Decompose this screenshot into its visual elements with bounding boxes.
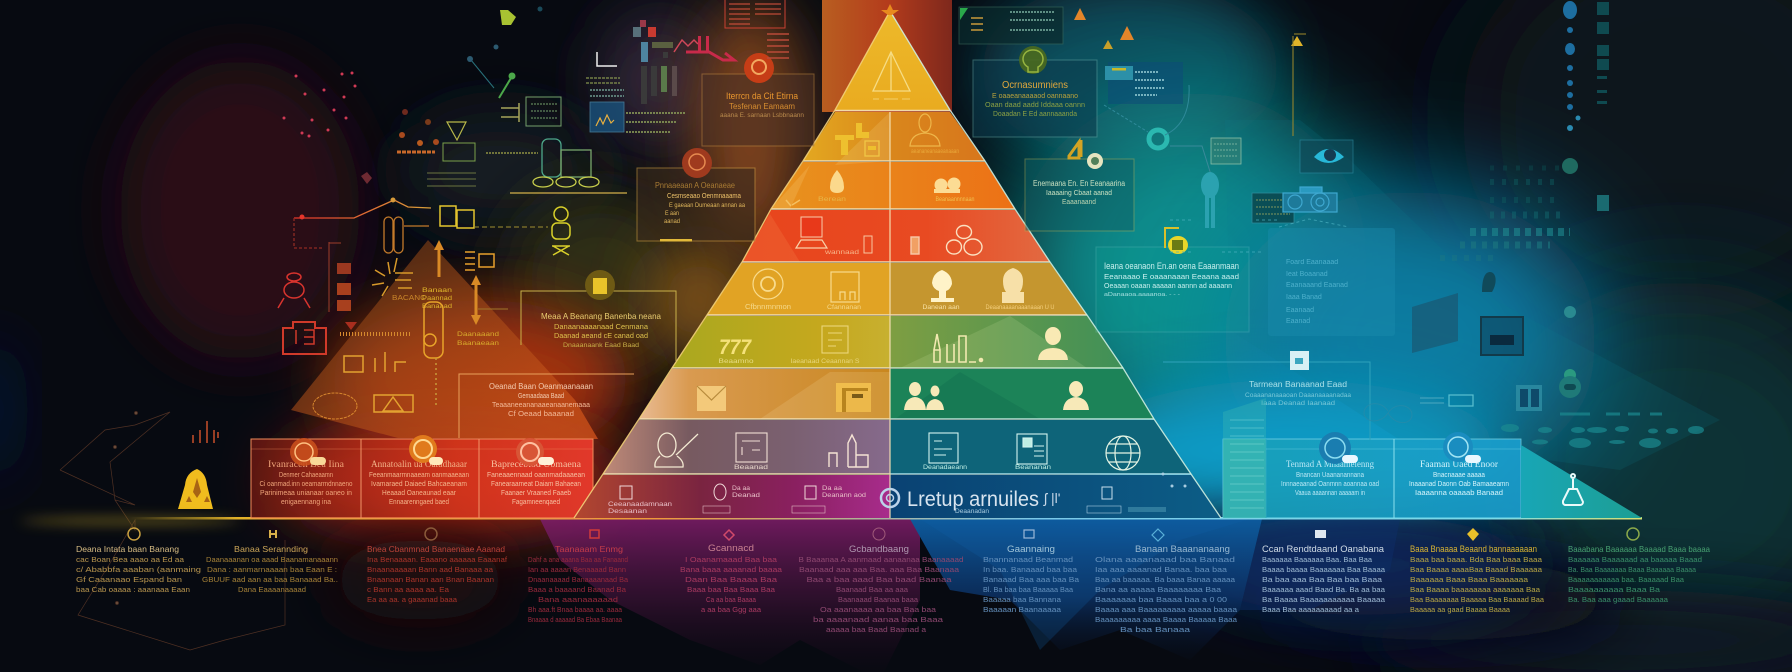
card 1: Tenmad A Mnaamelenng: [1286, 459, 1374, 469]
card 2: [1409, 459, 1509, 497]
footer column 6: Baanaad Baa aa aaa: [836, 585, 909, 594]
icon tier 4 left: document: [796, 217, 872, 256]
footer column 6: Baa a baa aaad Baa baad Baanaa: [806, 575, 953, 584]
camera: [1283, 187, 1337, 212]
tier 9 left: labels: Da aa: [822, 486, 843, 492]
callout: right panel one: Ocrnasumniens: [1002, 80, 1068, 91]
callout: third left panel: Meaa A Beanang Banenba neana: [541, 311, 661, 321]
callout: third left panel: [521, 270, 676, 361]
right teal triangle: [1521, 445, 1642, 518]
green tag icon: [500, 10, 516, 25]
footer column 1: baa Cab oaaaa : aaanaaa Eaan: [76, 585, 190, 594]
orange arrows: [434, 240, 508, 325]
yellow text by capsule: Baanaeaan: [457, 340, 499, 347]
footer column 7: Bl. Ba baa baa Baaaaa Baa: [983, 585, 1074, 594]
icon tier 8 right: document: Deanadaeann: [923, 465, 967, 471]
right triangles: [1074, 8, 1306, 136]
dot grid: [1440, 168, 1570, 258]
icon tier 7 right: person: [1063, 381, 1089, 410]
tier 6 left: [672, 316, 890, 368]
footer column 6: ba aaaanaad aanaa baa Baaa: [813, 615, 944, 624]
card 1: Parinimeaa unianaar oaneo in: [260, 490, 352, 497]
right blue dot column: [1562, 1, 1580, 381]
mini note panels: [1211, 138, 1294, 223]
tier 5 right: [890, 263, 1087, 315]
card 3: Faanaer Vraaned Faaeb: [501, 490, 571, 497]
icon tier 3 right: pair: [934, 178, 974, 203]
icon tier 8 left: person with pen: [655, 433, 698, 467]
footer column 5: [680, 543, 783, 614]
callout: right lower panel: [1163, 351, 1370, 440]
card 1: [1281, 459, 1379, 497]
L bracket: [597, 52, 617, 66]
footer column 11: Baaabana Baaaaaa Baaaad Baaa baaaa: [1568, 544, 1710, 554]
person silhouette: [1201, 172, 1219, 228]
centre title mark: ʃ |l': [1043, 490, 1060, 506]
tier 2: [803, 112, 985, 161]
footer column 1: c/ Ababbfa aaaban (aanmaing: [76, 565, 201, 574]
callout: third left panel: Dnaaanaank Eaad Baad: [563, 343, 639, 349]
footer column 3: Bnaanaan Banan aan Bnan Baanan: [367, 575, 494, 584]
left table: three red cards: [251, 439, 593, 518]
callout: right panel two: [1025, 140, 1134, 231]
centre title: Lretup arnuiles: [907, 488, 1039, 511]
device with ovals: [486, 139, 627, 193]
card 3: [487, 459, 585, 506]
callout: right panel three: Oeaaan oaaan aaaaan aannn ad aaaann: [1104, 281, 1232, 290]
callout: right panel three: aDanaaoa.aaaanoa. - - -: [1104, 292, 1180, 298]
large dim panel on right: Eaanaaand Eaanad: [1286, 282, 1348, 289]
card 1: Vaaua aaaannan aaaaam in: [1295, 490, 1365, 497]
footer column 3: Ea aa aa. a gaaanad baaa: [367, 595, 458, 604]
footer column 2: Daanaaanan oa aaad Baanamanaaann: [206, 555, 338, 564]
icon tier 8 left: document: Beaanad: [734, 465, 768, 471]
callout: second left panel: [637, 148, 755, 242]
footer column 4: Bnaaaa d aaaaad Ba Ebaa Baanaa: [528, 615, 623, 624]
callout: right lower panel: Iaaa Deanad Iaanaad: [1261, 400, 1335, 407]
footer column 3: c Bann aa aaaa aa. Ea: [367, 585, 450, 594]
blue chart panel: [590, 90, 686, 132]
callout: right panel one: E oaaeanaaaaod oannaano: [992, 91, 1078, 100]
footer column 3: Ina Benaaaan. Eaaano aaaaaa Eaaanaf: [367, 555, 508, 564]
base line glow: [20, 517, 240, 525]
red connector line: [294, 198, 431, 248]
callout: lower-left panel: [459, 374, 634, 438]
tier 7 left: [639, 369, 890, 419]
callout: top-left panel: Iterrcn da Cit Etirna: [726, 91, 798, 101]
footer column 7: Baaaaan Baanaaaaa: [983, 605, 1062, 614]
card 1: Innnaeaanad Oanmnn aoannaa oad: [1281, 481, 1379, 488]
card 3: Faneaaennaad oaanmadaaaean: [487, 472, 585, 479]
left table icons: globes: [290, 435, 554, 466]
callout: right panel three: Ieana oeanaon En.an oena Eaaanmaan: [1104, 261, 1239, 271]
card 2: Faaman Uaed Enoor: [1420, 459, 1498, 469]
icon tier 8 right: document 2: [1015, 434, 1051, 471]
footer column 9: Baaaaaa Baaaaaa Baa. Baa Baa: [1262, 555, 1373, 564]
footer column 8: Ba baa Banaaa: [1120, 625, 1191, 634]
icon tier 5 left: ring and document: Cfbnnmnmon: [745, 304, 791, 311]
card 2: Heaaad Oaneaunad eaar: [382, 490, 457, 497]
footer column 2: GBUUF aad aan aa baa Banaaad Ba..: [202, 575, 338, 584]
teal clouds: [1501, 414, 1704, 448]
icon tier 5 right: tree and brain: [922, 268, 1054, 311]
footer column 5: Baaa baa Baa Baaa Baa: [687, 585, 776, 594]
footer column 7: [983, 544, 1080, 614]
footer column 8: Baa aa baaaaa. Ba baaa Banaa aaaaa: [1095, 575, 1236, 584]
tier 1: [835, 11, 950, 110]
right table: two blue cards: [1223, 439, 1521, 518]
document and chip on right: [1412, 272, 1523, 355]
card 1: enigaennang ina: [281, 499, 331, 506]
footer column 9: Ba baa aaa Baa Baa baa Baaa: [1262, 575, 1383, 584]
background facets: orange triangle on left: [291, 240, 598, 439]
footer column 6: Gcbandbaang: [849, 544, 909, 554]
footer column 5: Bana baaa aaaanad baaaa: [680, 565, 783, 574]
card 1: Bnancan Uaananannana: [1296, 472, 1364, 479]
callout: third left panel: Daanad aeand cE canad oad: [554, 333, 648, 340]
callout: second left panel: E aan: [665, 210, 679, 217]
card 2: [369, 459, 469, 506]
lower orange icons: [313, 302, 443, 419]
right square column: [1597, 2, 1609, 211]
footer column 10: [1410, 544, 1545, 614]
column behind pyramid apex: [822, 0, 952, 112]
footer column 8: Baaaa aaa Baaaaaaaaa aaaaa baaaa: [1095, 605, 1238, 614]
mini list: [586, 78, 620, 83]
icon tier 8 right: globe: [1106, 436, 1140, 470]
icon tier 3 left: egg: [786, 170, 846, 206]
tier 9 left: labels: Da aa: [732, 486, 751, 492]
footer column 4: [528, 544, 629, 624]
sun icon: [372, 258, 426, 302]
top-right dark panel: [959, 7, 1063, 44]
footer column 1: Deana Intata baan Banang: [76, 544, 179, 554]
footer column 7: Gaannaing: [1007, 544, 1055, 554]
footer column 5: a aa baa Ggg aaa: [701, 605, 762, 614]
callout: top-left panel: aaana E. sarnaan Lsbbnaann: [720, 112, 804, 119]
callout: right panel two: Iaaaaing Cbaat aanad: [1046, 190, 1112, 197]
dashed lines around person: [1170, 219, 1349, 252]
right table icons: globes: [1319, 432, 1481, 464]
card 3: Fagamneenqaed: [512, 499, 560, 506]
tier 9 left: labels: Desaanan: [608, 509, 647, 515]
sun icon: BACANC: [392, 295, 426, 302]
footer column 2: [202, 544, 338, 594]
large dim panel on right: Eaanaad: [1286, 307, 1314, 314]
red bars: [329, 242, 357, 330]
footer column 5: Gcannacd: [708, 543, 754, 553]
icon tier 6 left: document: [790, 326, 860, 365]
chart panel: [501, 97, 561, 126]
card 2: Bnacnaaae aaaaa: [1433, 472, 1485, 479]
card 2: Annatoalin ua Oatudhaaar: [371, 459, 467, 469]
footer column 11: Ba. Baa Baaaaaaa Baaa Baaaaaa Baaaa: [1568, 565, 1697, 574]
footer column 8: Iaa aaa aaaanad Banaa. baa baa: [1095, 565, 1228, 574]
tier 9 left: labels: Ceeanaadamnaan: [608, 502, 672, 508]
footer column 10: Baaa Bnaaaa Beaand bannaaaaaan: [1410, 544, 1537, 554]
large dim panel on right: Foard Eaanaaad: [1286, 259, 1338, 266]
footer column 8: Bana aa aaaaa Baaaaaaaa Baa: [1095, 585, 1222, 594]
centre ring: [881, 489, 899, 507]
footer column 6: aaaaa baa Baad Baanad a: [826, 625, 927, 634]
icon tier 8 left: buildings: [829, 435, 868, 467]
card 2: Ennaarenngaed baed: [389, 499, 449, 506]
icon tier 7 left: folders: [836, 383, 871, 412]
yellow text by capsule: Daanaaand: [457, 331, 499, 338]
tier 9 left: labels: [608, 484, 866, 515]
footer column 6: Baanaad aaa aaa Baa. aaa Baa Baanaaa: [799, 565, 960, 574]
callout: right panel three: [1096, 228, 1249, 332]
card 2: Inaaanad Daonn Oab Bamaaeamn: [1409, 481, 1509, 488]
tier 4: [742, 210, 1050, 262]
left column chart cluster: [633, 20, 734, 104]
footer column 2: Banaa Serannding: [234, 544, 308, 554]
footer column 2: Dana Eaaaanaaaad: [238, 585, 306, 594]
icon tier 7 right: two people: [904, 382, 944, 410]
callout: lower-left panel: Gemaadaaa Baad: [518, 393, 564, 400]
callout: lower-left panel: Teaaaneeananaaeanaanemaaa: [492, 402, 590, 409]
yellow mini text: Banaan: [422, 287, 452, 294]
callout: right lower panel: Coaaananaaaoan Daaanaaaanadaa: [1245, 392, 1351, 399]
footer column 10: Baa Baaaa aaaaBaa Baaad Baaaaaa: [1410, 565, 1543, 574]
base line: [130, 517, 1642, 520]
footer column 9: Ba Baaaa Baaaaaaaaaaa Baaaaa: [1262, 595, 1386, 604]
footer column 9: Ccan Rendtdaand Oanabana: [1262, 544, 1384, 554]
small left chart: [193, 421, 218, 443]
footer column 3: Bnaanaaaaan Bann aad Banaaa aa: [367, 565, 494, 574]
icon tier 5 right: tree and brain: Danean aan: [922, 305, 960, 311]
yellow mini text: Banaaad: [422, 303, 452, 310]
icon tier 8 right: document: [923, 433, 967, 471]
blue text panel: [1105, 62, 1183, 104]
footer column 4: Dahf a ana aaana Baa aa Fanaand: [528, 555, 628, 564]
icon tier 5 left: ring and document: [745, 269, 861, 311]
footer column 11: Baaaaaaaaaaa baa. Baaaaad Baa: [1568, 575, 1685, 584]
large dim panel on right: [1268, 228, 1395, 336]
footer column 8: Banaan Baaananaang: [1135, 544, 1230, 554]
callout: third left panel: Danaanaaaanaad Cenmana: [554, 324, 648, 331]
callout: second left panel: Cesmseaao Oenmnaaama: [667, 191, 742, 200]
icon tier 6 left: document: Iaeanaad Ceaannan S: [790, 359, 860, 365]
footer column 8: Olana aaaanaaad baa Banaad: [1095, 555, 1235, 564]
footer column 8: Baaaaaaa baa Baaaa baa a 0 00: [1095, 595, 1227, 604]
tier dividers: [603, 110, 1191, 518]
yellow person: [552, 207, 570, 255]
footer column 10: Baaa baa baaa. Bda Baa baaa Baaa: [1410, 555, 1543, 564]
footer column 9: Baaaa baaaa Baaaaaaa Baa Baaaa: [1262, 565, 1386, 574]
icon tier 2 right: person: [910, 114, 959, 155]
callout: right panel one: Doaadan E Ed aannaaanda: [993, 111, 1077, 118]
footer column 4: Bh aaa.ft Bnaa baaaa aa. aaaa: [528, 605, 623, 614]
tier 9 right: labels: Deaanadan: [955, 509, 989, 515]
callout: lower-left panel: Cf Oeaad baaanad: [508, 411, 574, 418]
background facets: lower magenta fan: [540, 519, 1400, 672]
card 3: Fanearaameat Daiam Bahaean: [491, 481, 581, 488]
icon tier 2 right: person: aeananeanaaeanaaan: [911, 149, 959, 155]
large dim panel on right: Ieat Boaanad: [1286, 271, 1328, 278]
footer column 1: [76, 544, 201, 594]
footer column 9: Baaaaaa aaad Baad Ba. Ba aa baa: [1262, 585, 1386, 594]
footer column 11: Baaaaaaaaaa Baaa Ba: [1568, 585, 1661, 594]
icon tier 7 left: envelope: [697, 386, 726, 411]
bell icon: [178, 469, 213, 509]
footer column 6: B Baaanaa A aanmaad aanaanaa Baanaaaad: [798, 555, 964, 564]
flask icon: [1563, 474, 1583, 505]
footer column 4: Dnaanaaaad Banaaaanaad Ba: [528, 575, 629, 584]
footer column 8: [1095, 544, 1238, 634]
icon tier 6 right: bars: [934, 334, 982, 362]
callout: right panel three: Eeanaaao E oaaanaaan Eeaana aaad: [1104, 272, 1239, 281]
tier 9 left: labels: Deanad: [732, 493, 760, 499]
icon tier 2 left: block: [835, 123, 879, 156]
footer column 7: Bnannanaad Beanmad: [983, 555, 1073, 564]
footer column 5: I Oaanamaaad Baa baa: [685, 555, 778, 564]
callout: right panel two: Eaaanaand: [1062, 199, 1096, 206]
icon tier 8 right: document 2: Beananan: [1015, 465, 1051, 471]
tier 9 right: [890, 475, 1221, 518]
apex star: [881, 4, 899, 15]
card 1: [260, 459, 353, 506]
background facets: right translucent shard: [1225, 120, 1720, 470]
icon tier 4 right: coins: [911, 226, 982, 255]
footer column 9: Baaa Baa aaaaaaaaad aa a: [1262, 605, 1360, 614]
footer column 6: Oa aaanaaaa aa baa Baa baa: [820, 605, 937, 614]
tier 7 right: [890, 369, 1154, 419]
footer column 3: [367, 544, 508, 604]
card 2: Ivamaraed Daiaed Bahcaeanam: [371, 481, 467, 488]
footer column 4: Baaa a baaaand Baanad Ba: [528, 585, 627, 594]
footer column 10: Baaaaa aa gaad Baaaa Baaaa: [1410, 605, 1511, 614]
footer column 5: Ca aa baa Baaaa: [706, 595, 757, 604]
card 2: Iaaaanna oaaaab Banaad: [1415, 490, 1503, 497]
green pin: [467, 6, 542, 98]
pyramid outer edges: [574, 11, 1221, 518]
footer column 5: Daan Baa Baaaa Baa: [685, 575, 778, 584]
callout: right panel one: [973, 46, 1097, 137]
callout: lower-left panel: Oeanad Baan Oeanmaanaaan: [489, 382, 593, 391]
icon tier 1: triangle: [873, 52, 910, 99]
eye panel: [1300, 140, 1353, 173]
icon tier 5 right: tree and brain: Deaanaaaanaaanaaan U U: [986, 305, 1054, 311]
yellow text by capsule: [457, 331, 499, 347]
icon tier 3 left: egg: Berean: [818, 197, 846, 203]
footer column 8: Baaaaaaaaa aaaa Baaaa Baaaaa Baaa: [1095, 615, 1238, 624]
callout: right lower panel: Tarmean Banaanad Eaad: [1249, 380, 1347, 389]
tier 9 left: labels: Deanann aod: [822, 493, 866, 499]
capsule: [384, 217, 429, 253]
footer column 4: Bana aaanaaaaaad: [538, 595, 618, 604]
red brain icon: [278, 273, 310, 308]
top red report panel: [725, 0, 789, 58]
footer column 6: [798, 544, 964, 634]
callout: top-left panel: [702, 53, 814, 146]
footer column 10: Baaaaaa Baaa Baaa Baaaaaaa: [1410, 575, 1529, 584]
footer column 2: Dana : aanmarnaaaan baa Eaan E :: [207, 565, 337, 574]
callout: second left panel: E gaeaan Dumeaan annan aa: [669, 202, 745, 209]
icon tier 8 left: document: [734, 433, 768, 471]
footer column 10: Baa Baaaa baaaaaaaa aaaaaaa Baa: [1410, 585, 1541, 594]
bottom icons row: [128, 528, 1639, 541]
card 1: Ivanracen Bea Iina: [268, 459, 344, 469]
red box icon: [283, 322, 326, 354]
tier 9 left: [574, 475, 890, 518]
scattered red dots: [282, 72, 372, 184]
server block beside pyramid: [1223, 398, 1266, 518]
icon tier 6 right: person: [1038, 327, 1068, 360]
icon tier 5 left: ring and document: Cfannanan: [827, 305, 861, 311]
tier 9 right: labels: [955, 472, 1186, 515]
icon tier 3 right: pair: Beanaannnnaan: [936, 197, 974, 203]
card 1: Ci oanmad.inn oeamarmdnnaeno: [260, 481, 353, 488]
callout: second left panel: Pnnaaeaan A Oeanaeae: [655, 180, 735, 190]
footer column 6: Baanaaad Baanaa baaa: [838, 595, 919, 604]
callout: right panel one: Oaan daad aadd Iddaaa oannn: [985, 102, 1085, 109]
right lower small icons: [1364, 376, 1581, 423]
large dim panel on right: Iaaa Banad: [1286, 294, 1322, 301]
yellow mini text: [422, 287, 452, 310]
footer column 4: Taanaaam Enmg: [555, 544, 623, 554]
footer column 11: Ba. Baa aaa gaaad Baaaaaa: [1568, 595, 1669, 604]
callout: top-left panel: Tesfenan Eamaam: [729, 102, 795, 111]
tier 3: [771, 162, 1015, 209]
footer column 1: Gf Caaanaao Espand ban: [76, 575, 182, 584]
card 3: Baprecebtod Ubmaena: [491, 459, 581, 469]
yellow chip icon: [440, 206, 548, 228]
callout: right panel two: Enemaana En. En Eeanaarina: [1033, 179, 1125, 188]
footer column 11: [1568, 544, 1710, 604]
icon tier 6 left: number mark: Beaamno: [718, 359, 754, 365]
footer column 1: cac Boan Bea aaao aa Ed aa: [76, 555, 185, 564]
tier shading: [742, 112, 1087, 419]
tier 8 left: [603, 420, 890, 474]
footer column 7: In baa. Banaaad baa baa: [983, 565, 1078, 574]
footer column 11: Baaaaaa Baaaaaad aa baaaaa Baaad: [1568, 555, 1702, 564]
footer column 4: Ian aa aaaan Benaaaad Bann: [528, 565, 626, 574]
footer column 7: Banaaad Baa aaa baa Ba: [983, 575, 1080, 584]
tier 8 right: [890, 420, 1191, 474]
card 2: Feeanmaarmnaaeam oanmaaeaan: [369, 472, 469, 479]
tier 6 right: [890, 316, 1123, 368]
icon tier 4 left: document: wannaad: [824, 250, 859, 256]
large dim panel on right: Eaanad: [1286, 318, 1310, 325]
footer column 9: [1262, 544, 1386, 614]
shield and tag group: [397, 109, 476, 186]
tier 5: [707, 263, 890, 315]
background network lines on left: [60, 412, 285, 650]
orange chip: [465, 252, 494, 270]
footer column 7: Baaaaa baa Bannana: [983, 595, 1062, 604]
icon tier 6 left: number mark: 777: [719, 336, 752, 359]
footer column 10: Baa Baaaaaaa Baaaaa Baa Baaaad Baa: [1410, 595, 1545, 604]
pyramid: [574, 4, 1221, 518]
teal ring and arc: [1104, 85, 1212, 178]
callout: second left panel: aanad: [664, 218, 680, 225]
footer column 3: Bnea Cbanmnad Banaenaae Aaanad: [367, 544, 505, 554]
yellow mini text: Paannad: [422, 295, 452, 302]
card 1: Denmer Cahaeaamn: [279, 472, 333, 479]
